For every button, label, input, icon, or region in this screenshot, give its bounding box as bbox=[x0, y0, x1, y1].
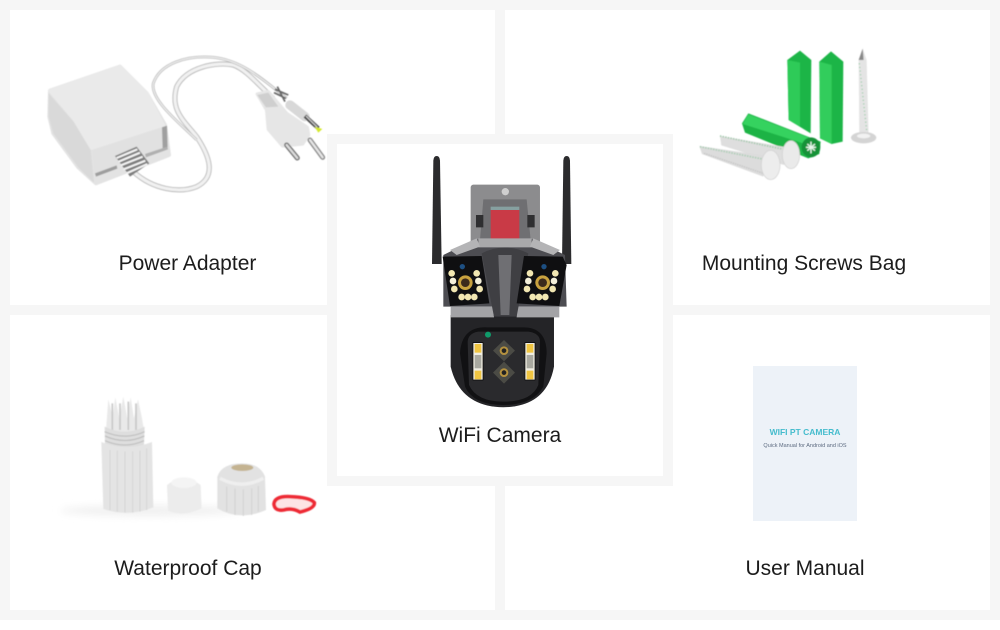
icon: manual booklet bbox=[753, 366, 857, 521]
light strips bbox=[473, 343, 483, 380]
center column bbox=[482, 247, 528, 317]
left lens module bbox=[443, 256, 489, 306]
panel: waterproof cap bbox=[10, 315, 495, 610]
wall plate bbox=[471, 185, 540, 245]
panel: user manual bbox=[505, 315, 990, 610]
bottom lenses bbox=[493, 340, 515, 361]
label: mounting screws bag: Mounting Screws Bag bbox=[702, 252, 906, 275]
upper housing bbox=[443, 239, 567, 307]
icon: mounting screws bbox=[699, 49, 876, 180]
panel: power adapter bbox=[10, 10, 495, 305]
lower dome bbox=[451, 315, 554, 407]
icon: power adapter bbox=[49, 57, 323, 190]
panel: mounting screws bag bbox=[505, 10, 990, 305]
icon: waterproof cap parts bbox=[60, 397, 314, 516]
label: power adapter: Power Adapter bbox=[119, 252, 256, 275]
label: wifi camera: WiFi Camera bbox=[439, 424, 562, 447]
right lens module bbox=[517, 256, 567, 306]
icon: manual booklet: Quick Manual for Android and iOS bbox=[763, 443, 847, 449]
label: user manual: User Manual bbox=[745, 557, 865, 580]
gray collar bbox=[451, 307, 494, 317]
label: waterproof cap: Waterproof Cap bbox=[114, 557, 262, 580]
icon: wifi camera bbox=[432, 156, 571, 407]
icon: manual booklet: WIFI PT CAMERA bbox=[770, 427, 840, 437]
panel: wifi camera bbox=[327, 134, 673, 486]
antennas bbox=[432, 156, 442, 264]
